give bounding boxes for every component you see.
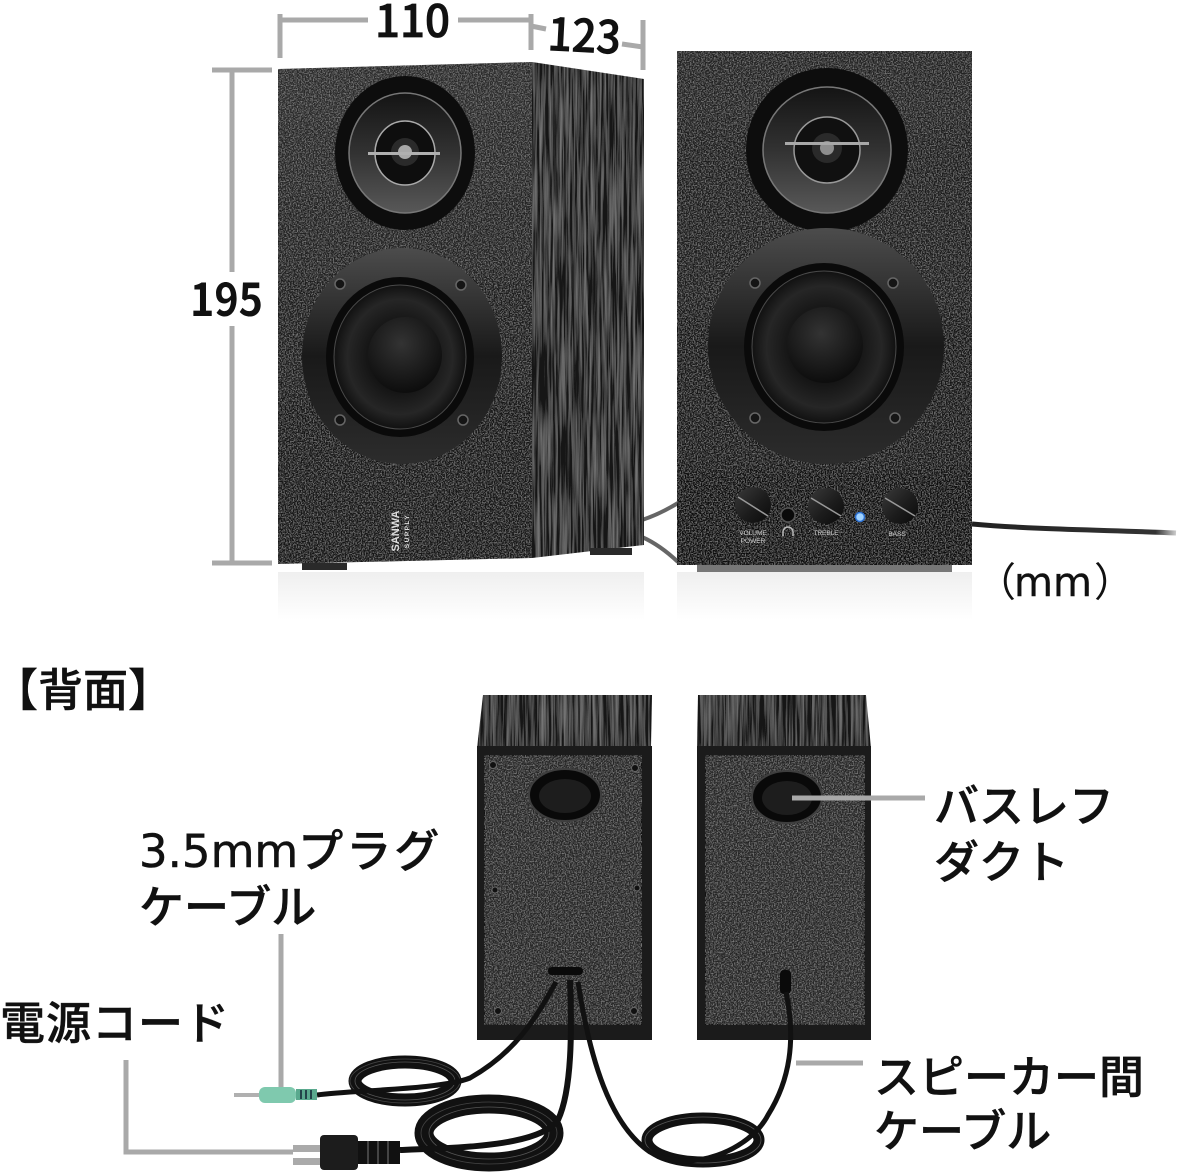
back panel bbox=[705, 755, 865, 1025]
label: inter-speaker cable: ケーブル bbox=[874, 1106, 1051, 1157]
control: bass knob: BASS bbox=[888, 531, 906, 538]
speaker feet bbox=[302, 548, 632, 570]
woofer bbox=[302, 248, 502, 464]
cable grommet bbox=[548, 967, 583, 975]
woofer bbox=[708, 228, 944, 464]
control: bass knob bbox=[882, 488, 918, 538]
power cable from right speaker bbox=[972, 524, 1176, 533]
tweeter bbox=[746, 68, 908, 232]
tweeter bbox=[335, 76, 475, 230]
bass reflex port bbox=[752, 771, 822, 823]
screws bbox=[490, 762, 640, 1014]
left front speaker bbox=[278, 62, 644, 570]
icon: power plug bbox=[293, 1135, 400, 1170]
label: inter-speaker cable: スピーカー間 bbox=[874, 1052, 1144, 1103]
label: 3.5mm plug cable: 3.5mmプラグ bbox=[139, 825, 442, 878]
label: inter-speaker cable bbox=[874, 1052, 1144, 1157]
logo: SANWA SUPPLY: SANWA bbox=[390, 510, 402, 551]
unit label bbox=[976, 560, 1134, 606]
control: treble knob: TREBLE bbox=[813, 530, 839, 537]
right rear speaker bbox=[697, 695, 871, 1040]
back body bbox=[697, 746, 871, 1040]
control: volume knob: VOLUME bbox=[739, 530, 767, 537]
callout lines bbox=[126, 798, 925, 1152]
unit label: （ bbox=[976, 561, 1016, 605]
label: 3.5mm plug cable: ケーブル bbox=[139, 882, 316, 933]
unit label: ） bbox=[1094, 561, 1134, 605]
unit label: mm bbox=[1014, 560, 1092, 606]
speaker cable jack bbox=[780, 970, 791, 994]
top panel: wood grain bbox=[477, 695, 652, 748]
label: 3.5mm plug cable bbox=[139, 825, 442, 933]
top panel: wood grain bbox=[697, 695, 871, 748]
cable: 3.5mm plug cable bbox=[317, 982, 556, 1103]
control: volume knob bbox=[735, 487, 771, 545]
speaker front panel bbox=[278, 62, 532, 564]
cable: power cord coil bbox=[400, 980, 571, 1164]
dimension lines bbox=[212, 14, 643, 563]
label: bass reflex duct: ダクト bbox=[934, 837, 1069, 888]
left rear speaker bbox=[477, 695, 652, 1040]
speaker side panel: wood grain bbox=[532, 62, 644, 558]
speaker panel bbox=[677, 51, 972, 565]
control: treble knob bbox=[808, 488, 844, 537]
back body bbox=[477, 746, 652, 1040]
connecting cables between front speakers bbox=[642, 503, 678, 562]
bass reflex port bbox=[529, 769, 601, 821]
label: bass reflex duct: バスレフ bbox=[934, 781, 1114, 832]
label: bass reflex duct bbox=[934, 781, 1114, 888]
logo: SANWA SUPPLY bbox=[390, 510, 411, 551]
power LED bbox=[856, 512, 864, 522]
speaker base bbox=[697, 565, 952, 572]
control: volume knob: POWER bbox=[741, 538, 766, 545]
cable: inter-speaker cable bbox=[578, 982, 791, 1163]
label: power cord: 電源コード bbox=[0, 998, 230, 1049]
dimension: height 195: 195 bbox=[190, 264, 263, 329]
back panel bbox=[484, 755, 642, 1025]
logo: SANWA SUPPLY: SUPPLY bbox=[404, 514, 411, 548]
right front speaker bbox=[677, 51, 972, 572]
dimension: depth 123: 123 bbox=[546, 0, 623, 67]
control: headphone jack bbox=[781, 508, 795, 536]
reflection under front speakers bbox=[278, 572, 972, 620]
icon: 3.5mm plug bbox=[234, 1087, 317, 1103]
